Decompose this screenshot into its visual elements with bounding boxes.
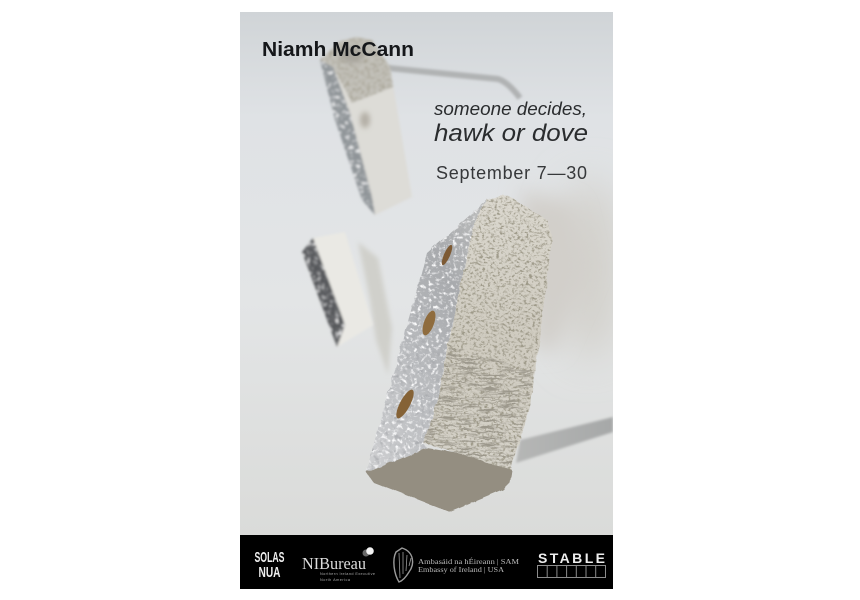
logo: Solas Nua: NUA (258, 564, 281, 581)
logo: Solas Nua: SOLAS (254, 549, 284, 566)
brick: upper left (320, 37, 412, 215)
logo: Embassy of Ireland: Embassy of Ireland | USA (418, 565, 505, 574)
logo: Irish harp (394, 548, 413, 582)
brick face: rough plaster (423, 195, 552, 483)
wall rod: lower right (516, 417, 613, 463)
rust spot: bottom (396, 390, 414, 418)
logo: Embassy of Ireland (418, 556, 519, 574)
logo: Solas Nua (254, 549, 284, 581)
sponsor bar (240, 535, 613, 589)
rust spot: middle (422, 310, 436, 336)
wall rod: upper (388, 68, 520, 98)
logo: NI Bureau: NIBureau (302, 554, 366, 573)
artist name: Niamh McCann (262, 39, 414, 61)
logo: NI Bureau: North America (320, 578, 351, 582)
poster (240, 12, 613, 589)
exhibition title: hawk or dove (434, 120, 588, 147)
logo: NI Bureau: Northern Ireland Executive (320, 572, 375, 576)
shadow: middle brick (358, 242, 392, 375)
logo: Stable (538, 550, 606, 578)
logo: NI Bureau (302, 547, 375, 582)
exhibition dates: September 7—30 (436, 163, 587, 183)
rust spot: top (442, 244, 452, 266)
brick: large foreground (366, 195, 552, 512)
exhibition title (434, 99, 588, 147)
brick face: foil (366, 200, 487, 472)
brick face: underside (366, 448, 512, 512)
logo: Embassy of Ireland: Ambasáid na hÉireann | SAM (418, 556, 519, 566)
brick: middle left (302, 232, 373, 347)
photograph panel (240, 12, 625, 535)
logo: Stable: STABLE (538, 550, 605, 566)
exhibition title: someone decides, (434, 99, 587, 119)
